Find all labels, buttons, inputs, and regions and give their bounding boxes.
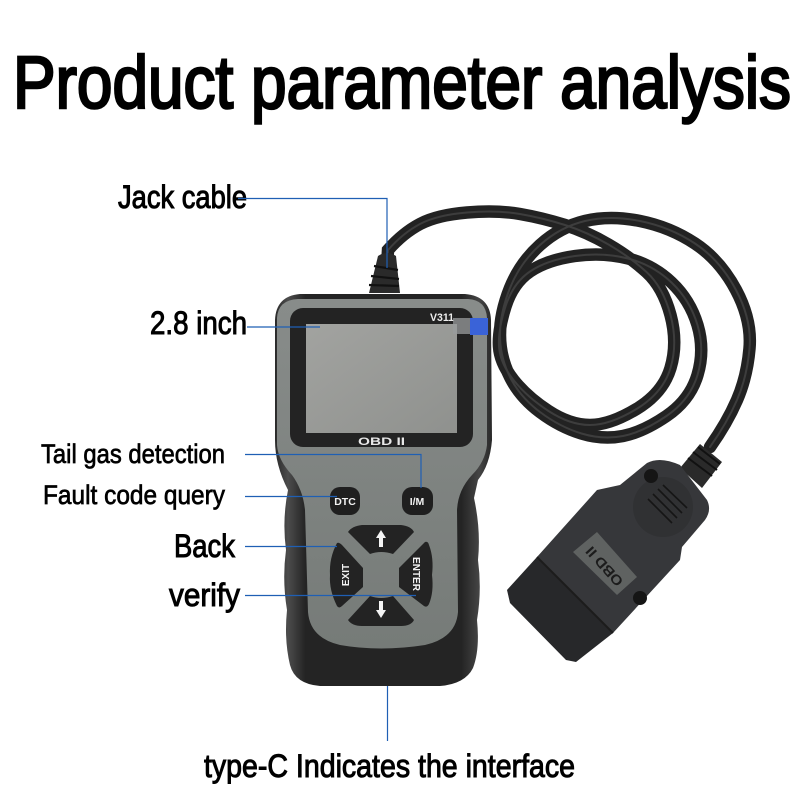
OBD connector: OBD II (582, 543, 626, 590)
device grey faceplate (277, 299, 487, 648)
leader: verify (245, 594, 416, 596)
label: type-C interface: type-C Indicates the interface (204, 748, 575, 784)
label: Jack cable: Jack cable (118, 179, 247, 215)
button: EXIT: EXIT (341, 564, 352, 586)
label: Fault code query: Fault code query (43, 480, 225, 510)
LCD screen (306, 324, 457, 433)
leader: Jack cable (238, 198, 387, 268)
button: I/M (402, 487, 433, 515)
model label: V311 (430, 312, 454, 324)
button: DTC: DTC (334, 496, 356, 508)
OBD II logo: OBD II (358, 436, 405, 448)
button: EXIT (330, 543, 363, 608)
button: I/M: I/M (410, 496, 425, 508)
scanner strain relief (369, 253, 400, 293)
OBD connector (507, 444, 722, 662)
scanner device (275, 294, 492, 686)
leader: type-C (386, 686, 388, 741)
leader: Tail gas detection (245, 454, 421, 488)
leader: Fault code query (245, 496, 337, 498)
blue protective tab (453, 318, 488, 335)
button: up (348, 525, 414, 554)
leader: 2.8 inch (247, 326, 320, 328)
button: DTC (330, 487, 360, 515)
button: down (348, 596, 414, 626)
label: verify: verify (169, 577, 240, 613)
button: ENTER: ENTER (410, 557, 421, 592)
OBD cable (387, 212, 750, 447)
label: Back: Back (174, 528, 236, 564)
label: Tail gas detection: Tail gas detection (41, 439, 225, 469)
screen bezel (290, 308, 473, 447)
label: 2.8 inch: 2.8 inch (150, 305, 247, 341)
device rubber housing (275, 294, 492, 686)
leader: Back (245, 546, 337, 548)
button: ENTER (399, 542, 433, 607)
